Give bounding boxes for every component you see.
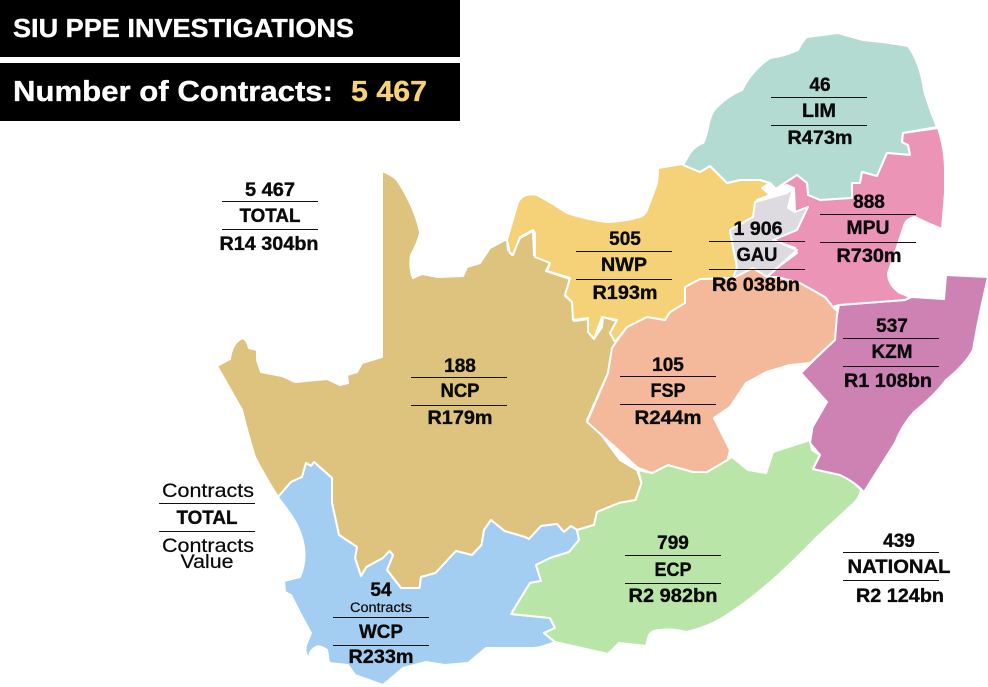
legend key: Value	[180, 552, 234, 573]
label: NWP: R193m	[592, 283, 658, 304]
region: Northern Cape	[217, 171, 642, 588]
title bar	[0, 0, 460, 57]
label: total: TOTAL	[240, 206, 301, 227]
label: LIM: R473m	[788, 128, 852, 149]
number of contracts bar	[0, 63, 460, 121]
region: Mpumalanga	[767, 128, 945, 307]
region: KwaZulu-Natal	[801, 275, 988, 492]
label: NATIONAL: 439	[883, 531, 915, 552]
label: KZM	[843, 316, 939, 392]
label: KZM: KZM	[872, 342, 912, 363]
label: ECP: ECP	[654, 560, 692, 581]
legend key: Contracts	[162, 536, 254, 557]
region: North West	[507, 164, 770, 342]
label: FSP: R244m	[634, 408, 702, 429]
map of South Africa provinces	[217, 33, 988, 685]
legend key	[159, 481, 255, 573]
label: NCP: R179m	[428, 408, 492, 429]
region: Free State	[587, 268, 839, 473]
label: ECP: 799	[657, 533, 689, 554]
number of contracts bar: 5 467	[351, 76, 427, 108]
label: NATIONAL: R2 124bn	[856, 586, 944, 607]
title bar: SIU PPE INVESTIGATIONS	[13, 13, 354, 43]
label: MPU: MPU	[846, 218, 890, 239]
label: NATIONAL: NATIONAL	[848, 557, 951, 578]
label: GAU: GAU	[736, 245, 778, 266]
label: LIM: 46	[809, 75, 831, 96]
label: WCP: R233m	[348, 647, 414, 668]
label: KZM: 537	[876, 316, 908, 337]
region: Western Cape	[278, 462, 579, 685]
label: LIM	[771, 75, 867, 149]
label: WCP: WCP	[359, 622, 403, 643]
label: total: R14 304bn	[220, 234, 318, 255]
label: NATIONAL	[843, 531, 951, 607]
region: Eastern Cape	[511, 440, 861, 654]
label: MPU	[820, 192, 916, 267]
label: FSP: FSP	[650, 381, 686, 402]
label: total	[220, 180, 318, 255]
label: NWP: 505	[609, 229, 641, 250]
label: WCP: 54	[370, 580, 392, 601]
label: GAU: R6 038bn	[712, 275, 800, 296]
label: total: 5 467	[245, 180, 295, 201]
label: MPU: R730m	[836, 246, 902, 267]
label: ECP: R2 982bn	[628, 586, 718, 607]
label: NCP: 188	[444, 356, 476, 377]
label: MPU: 888	[853, 192, 885, 213]
label: WCP: Contracts	[350, 600, 412, 615]
label: NCP: NCP	[440, 381, 480, 402]
label: GAU	[709, 219, 805, 296]
legend key: TOTAL	[176, 508, 238, 529]
number of contracts bar: Number of Contracts:	[13, 76, 333, 108]
region: Limpopo	[683, 33, 937, 200]
label: NWP: NWP	[601, 255, 647, 276]
label: NCP	[411, 356, 507, 429]
label: ECP	[625, 533, 721, 607]
label: KZM: R1 108bn	[844, 371, 932, 392]
label: GAU: 1 906	[734, 219, 782, 240]
legend key: Contracts	[162, 481, 254, 502]
label: WCP	[333, 580, 429, 668]
label: LIM: LIM	[802, 101, 836, 122]
region: Gauteng	[730, 188, 808, 278]
label: FSP: 105	[652, 355, 684, 376]
label: NWP	[576, 229, 672, 304]
label: FSP	[620, 355, 716, 429]
